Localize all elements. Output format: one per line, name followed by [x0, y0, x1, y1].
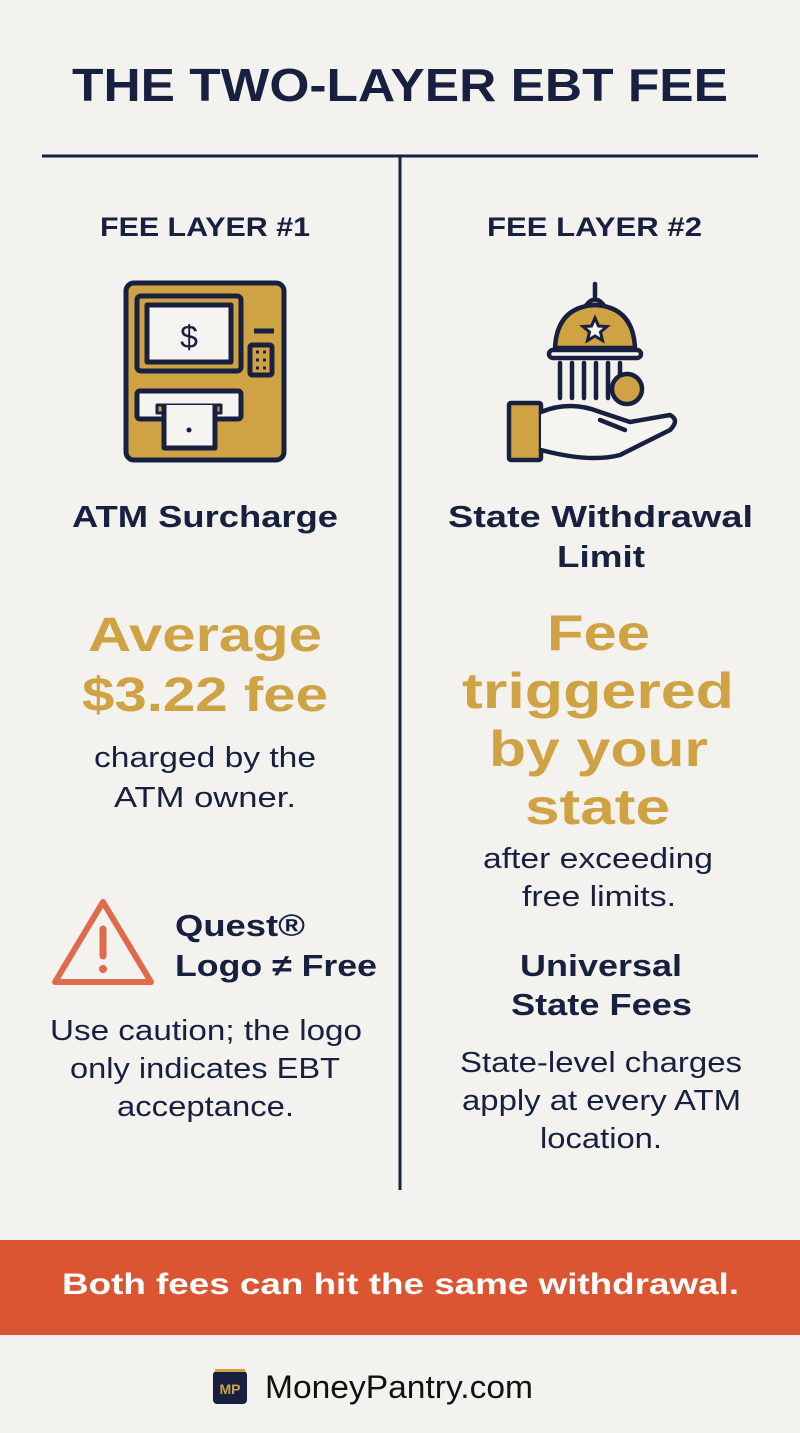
footer logo: MP — [220, 1381, 240, 1397]
text: use caution: Use caution; the logo — [50, 1015, 362, 1047]
text: after exceeding free limits: free limits. — [522, 881, 676, 913]
label: state withdrawal limit — [448, 499, 753, 574]
panel: fee layer 1: $3.22 fee — [82, 669, 328, 722]
text: state-level charges: State-level charges — [460, 1047, 742, 1079]
banner — [0, 1240, 800, 1335]
stat: fee triggered by your state: Fee — [547, 605, 650, 661]
text: after exceeding free limits — [483, 843, 713, 913]
text: charged by the ATM owner: charged by the — [94, 742, 316, 774]
stat: fee triggered by your state — [462, 605, 734, 835]
label: state withdrawal limit: Limit — [557, 539, 645, 574]
banner: Both fees can hit the same withdrawal. — [62, 1268, 739, 1301]
panel: fee layer 1: ATM owner. — [114, 782, 296, 814]
heading: fee layer 1: FEE LAYER #1 — [100, 212, 310, 242]
panel: fee layer 2 — [448, 212, 753, 1155]
callout: universal state fees: Universal — [520, 948, 682, 983]
text: state-level charges: apply at every ATM — [462, 1085, 741, 1117]
text: use caution: only indicates EBT — [70, 1053, 340, 1085]
stat: average fee: Average — [88, 609, 322, 662]
icon: warning triangle — [55, 902, 151, 982]
callout: universal state fees — [511, 948, 692, 1022]
stat: fee triggered by your state: by your — [489, 721, 708, 777]
title: THE TWO-LAYER EBT FEE — [72, 59, 728, 111]
panel: fee layer 1 — [50, 212, 377, 1123]
text: use caution — [50, 1015, 362, 1123]
text: use caution: acceptance. — [117, 1091, 294, 1123]
text: state-level charges — [460, 1047, 742, 1155]
icon: ATM — [126, 283, 284, 460]
footer logo: MoneyPantry.com — [265, 1369, 533, 1405]
label: state withdrawal limit: State Withdrawal — [448, 499, 753, 534]
panel: fee layer 1: $ — [180, 319, 198, 355]
callout: Quest logo not free: Quest® — [175, 908, 305, 943]
callout: Quest logo not free — [175, 908, 377, 983]
callout: universal state fees: State Fees — [511, 987, 692, 1022]
stat: fee triggered by your state: state — [525, 779, 670, 835]
callout: Quest logo not free: Logo ≠ Free — [175, 948, 377, 983]
label: ATM Surcharge: ATM Surcharge — [72, 499, 338, 534]
icon: capitol in hand — [509, 284, 675, 460]
text: state-level charges: location. — [540, 1123, 662, 1155]
text: after exceeding free limits: after exceeding — [483, 843, 713, 875]
heading: fee layer 2: FEE LAYER #2 — [487, 212, 702, 242]
stat: fee triggered by your state: triggered — [462, 663, 734, 719]
